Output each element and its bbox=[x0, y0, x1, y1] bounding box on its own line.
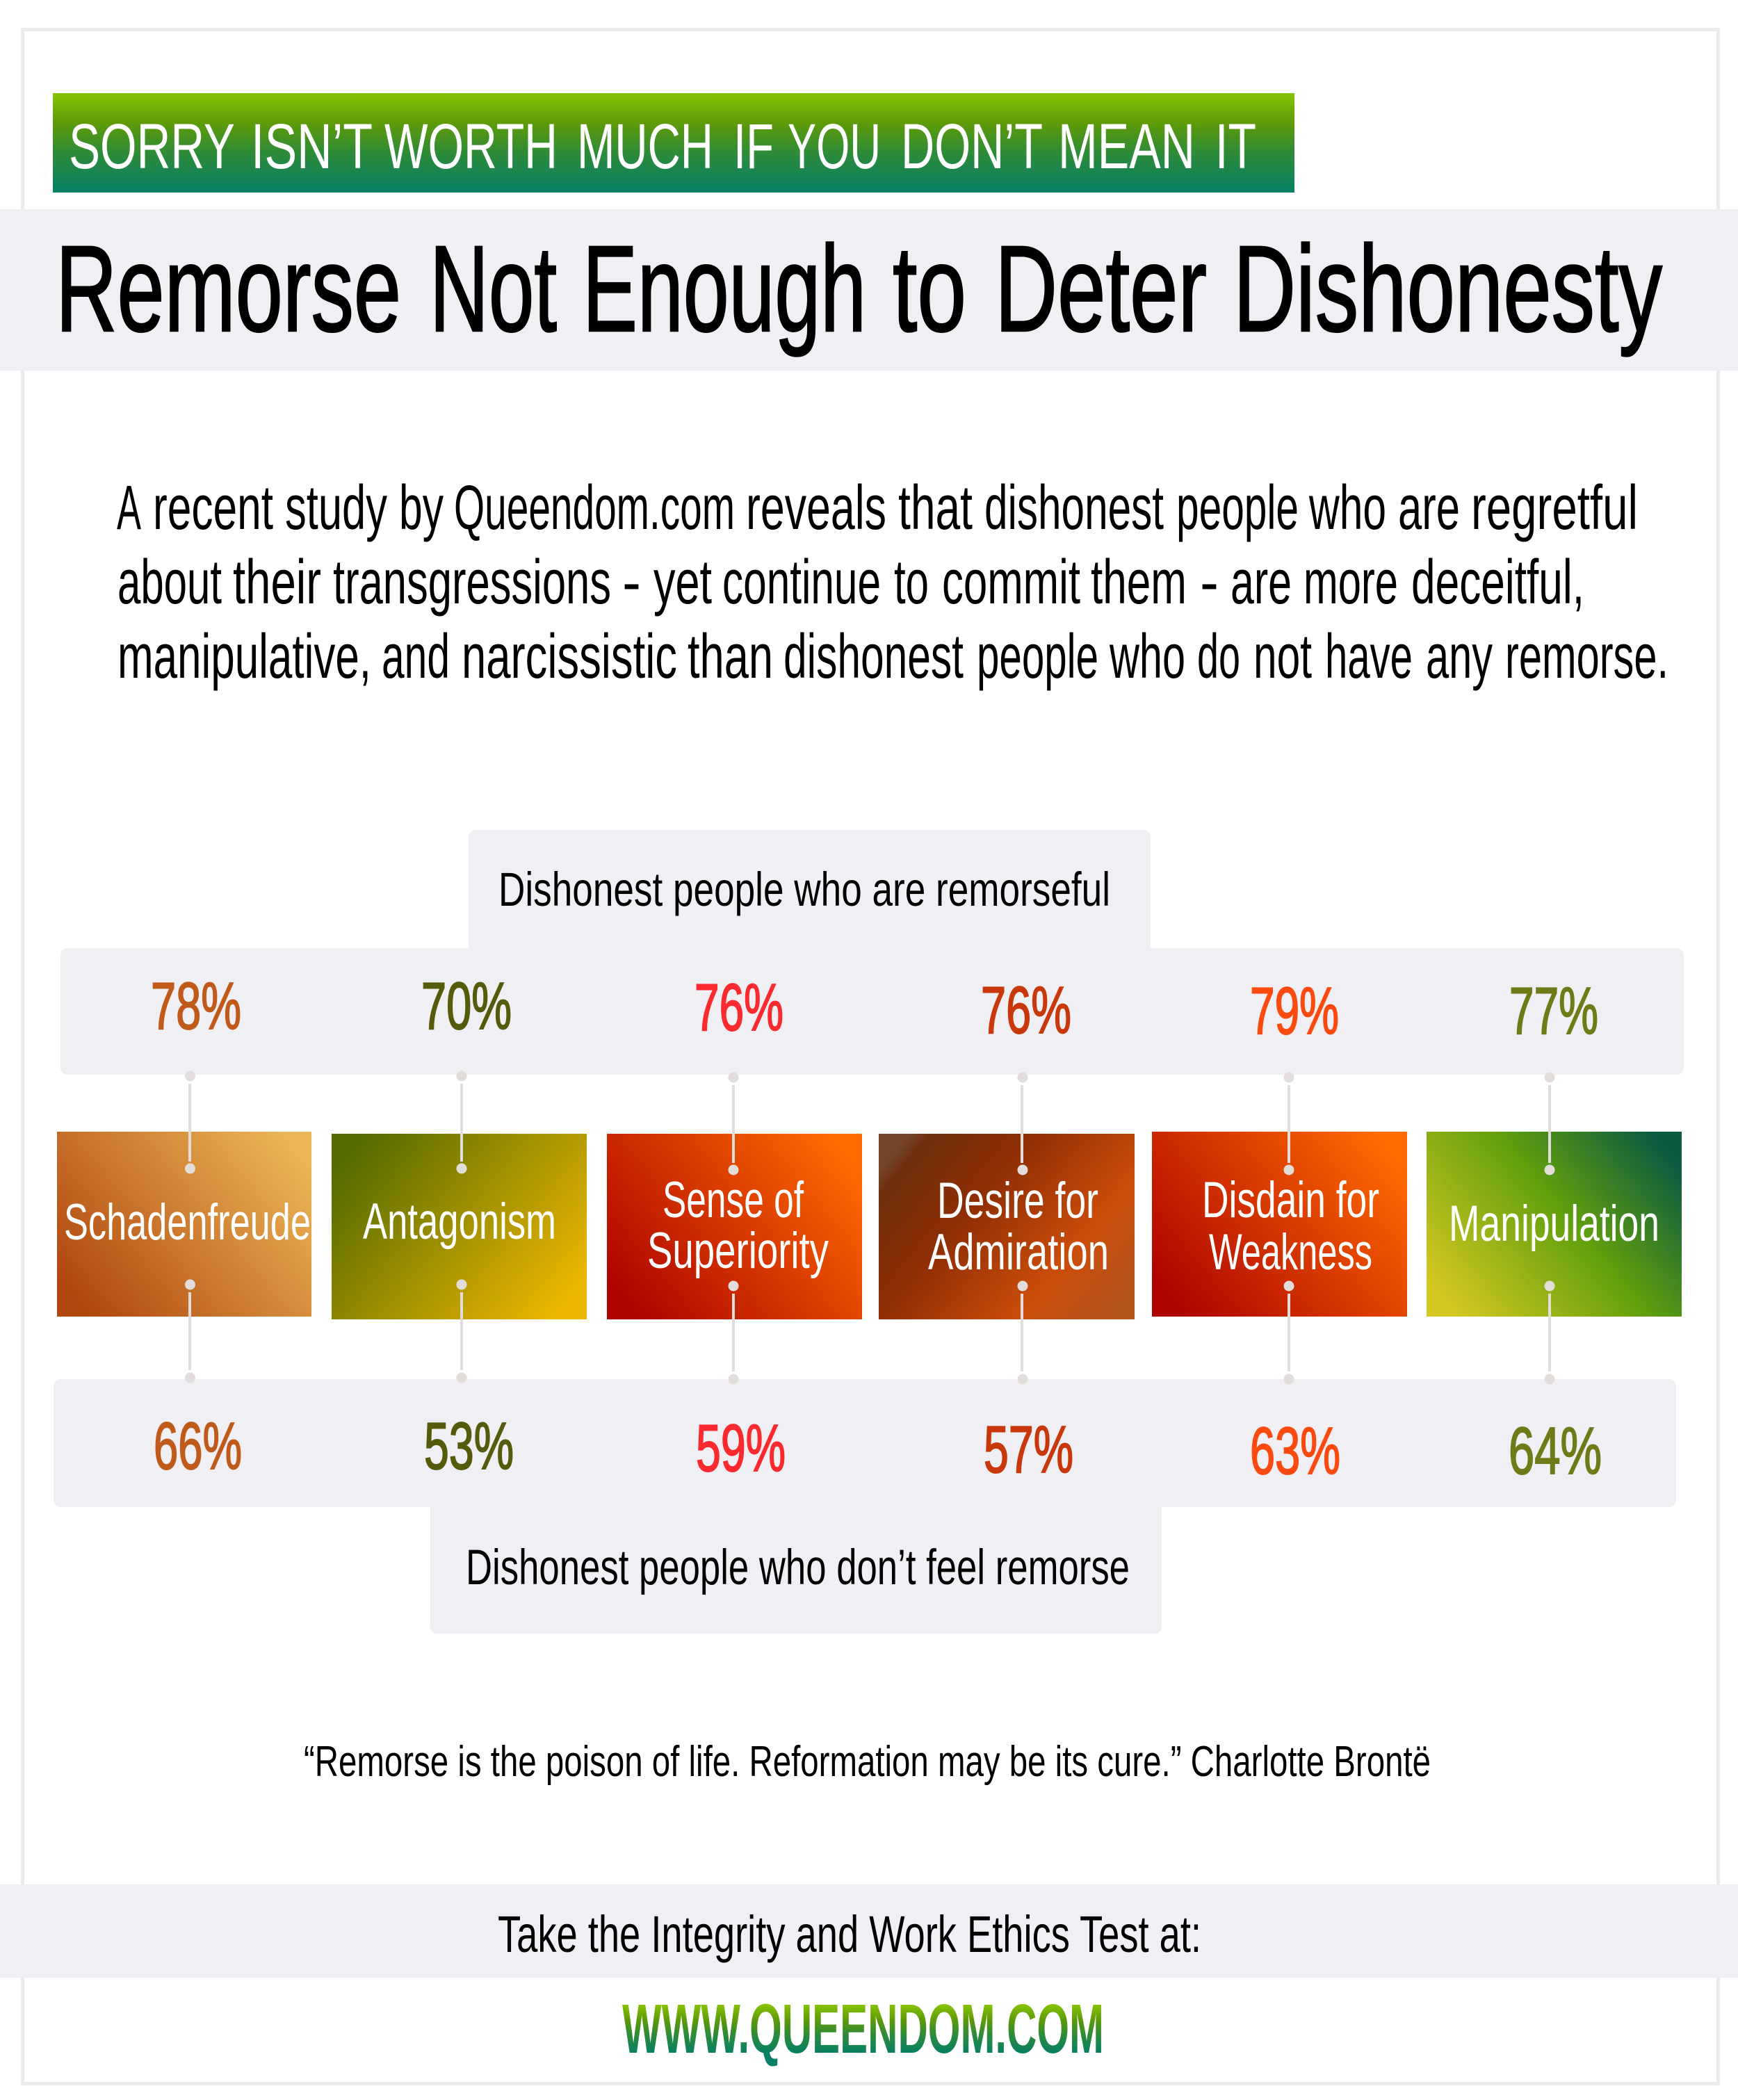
intro paragraph: that bbox=[898, 473, 973, 543]
trait: Manipulation bbox=[1427, 1132, 1682, 1317]
intro paragraph: - bbox=[1200, 548, 1219, 617]
title: Enough bbox=[583, 221, 866, 357]
intro paragraph: reveals bbox=[746, 473, 886, 543]
intro paragraph: them bbox=[1091, 548, 1187, 617]
remorseful percentages: 77% bbox=[1509, 974, 1598, 1048]
intro paragraph: who bbox=[1308, 473, 1386, 543]
intro paragraph: have bbox=[1325, 622, 1413, 692]
intro paragraph: deceitful, bbox=[1411, 548, 1584, 617]
intro paragraph: regretful bbox=[1471, 473, 1638, 543]
kicker text: MEAN bbox=[1058, 111, 1195, 182]
trait: Disdain for Weakness bbox=[1152, 1132, 1407, 1317]
intro paragraph: dishonest bbox=[783, 622, 964, 692]
trait: Disdain for Weakness: Weakness bbox=[1209, 1224, 1372, 1280]
title band bbox=[0, 209, 1738, 371]
label: no remorse: Dishonest people who don’t feel remorse bbox=[466, 1540, 1130, 1595]
no-remorse percentages: 64% bbox=[1509, 1414, 1602, 1488]
intro paragraph: are bbox=[1398, 473, 1460, 543]
intro paragraph: narcissistic bbox=[462, 622, 677, 692]
no-remorse percentages: 53% bbox=[424, 1409, 514, 1483]
remorseful percentages: 76% bbox=[981, 973, 1071, 1048]
intro paragraph: people bbox=[977, 622, 1098, 692]
kicker text: WORTH bbox=[384, 111, 558, 182]
intro paragraph: transgressions bbox=[333, 548, 611, 617]
no-remorse percentages: 66% bbox=[154, 1409, 242, 1483]
trait: Antagonism: Antagonism bbox=[363, 1194, 556, 1250]
kicker text: SORRY bbox=[69, 111, 235, 182]
trait: Desire for Admiration: Desire for bbox=[937, 1173, 1098, 1229]
title: Remorse bbox=[56, 221, 401, 357]
no-remorse percentages: 63% bbox=[1250, 1414, 1340, 1488]
footer band bbox=[0, 1885, 1738, 1978]
intro paragraph: yet bbox=[653, 548, 712, 617]
trait: Disdain for Weakness: Disdain for bbox=[1202, 1172, 1379, 1228]
kicker text: IT bbox=[1215, 111, 1256, 182]
intro paragraph: to bbox=[894, 548, 929, 617]
trait: Desire for Admiration bbox=[879, 1134, 1135, 1319]
intro paragraph: any bbox=[1426, 622, 1493, 692]
kicker text: ISN’T bbox=[251, 111, 373, 182]
kicker text: YOU bbox=[788, 111, 881, 182]
intro paragraph: people bbox=[1176, 473, 1299, 543]
website: WWW.QUEENDOM.COM bbox=[622, 1990, 1104, 2068]
trait: Schadenfreude bbox=[57, 1132, 311, 1317]
intro paragraph: do bbox=[1197, 622, 1240, 692]
no-remorse percentages: 57% bbox=[984, 1413, 1073, 1487]
connectors bbox=[185, 1071, 1554, 1385]
intro paragraph bbox=[117, 473, 1668, 692]
no-remorse percentages bbox=[154, 1409, 1602, 1488]
intro paragraph: who bbox=[1109, 622, 1185, 692]
title: to bbox=[893, 221, 966, 357]
kicker text bbox=[69, 111, 1256, 182]
intro paragraph: are bbox=[1231, 548, 1292, 617]
intro paragraph: A bbox=[117, 473, 141, 543]
intro paragraph: - bbox=[622, 548, 641, 617]
intro paragraph: by bbox=[399, 473, 444, 543]
remorseful percentages: 76% bbox=[695, 970, 783, 1045]
trait: Sense of Superiority: Sense of bbox=[663, 1172, 804, 1228]
intro paragraph: recent bbox=[153, 473, 273, 543]
trait: Manipulation: Manipulation bbox=[1449, 1196, 1659, 1252]
intro paragraph: about bbox=[117, 548, 222, 617]
kicker text: DON’T bbox=[901, 111, 1043, 182]
no-remorse percentages: 59% bbox=[696, 1411, 786, 1486]
intro paragraph: their bbox=[233, 548, 321, 617]
intro paragraph: study bbox=[285, 473, 387, 543]
intro paragraph: manipulative, bbox=[117, 622, 371, 692]
remorseful percentages bbox=[151, 969, 1598, 1048]
quote: “Remorse is the poison of life. Reformation may be its cure.” Charlotte Brontë bbox=[304, 1738, 1431, 1786]
kicker banner bbox=[53, 93, 1294, 193]
panel: no-remorse group bbox=[54, 1379, 1676, 1634]
trait: Sense of Superiority bbox=[607, 1134, 862, 1319]
intro paragraph: commit bbox=[942, 548, 1080, 617]
kicker text: MUCH bbox=[577, 111, 713, 182]
remorseful percentages: 78% bbox=[151, 969, 241, 1043]
title: Not bbox=[430, 221, 557, 357]
trait: Schadenfreude: Schadenfreude bbox=[64, 1194, 311, 1251]
intro paragraph: continue bbox=[722, 548, 881, 617]
title: Deter bbox=[995, 221, 1207, 357]
trait: Antagonism bbox=[332, 1134, 587, 1319]
intro paragraph: and bbox=[382, 622, 450, 692]
trait: Desire for Admiration: Admiration bbox=[928, 1224, 1109, 1280]
remorseful percentages: 70% bbox=[421, 969, 512, 1043]
remorseful percentages: 79% bbox=[1250, 974, 1339, 1048]
label: remorseful: Dishonest people who are remorseful bbox=[498, 863, 1110, 916]
call to action: Take the Integrity and Work Ethics Test at: bbox=[498, 1905, 1201, 1963]
intro paragraph: more bbox=[1304, 548, 1398, 617]
intro paragraph: dishonest bbox=[984, 473, 1164, 543]
panel: remorseful group bbox=[60, 830, 1684, 1075]
trait: Sense of Superiority: Superiority bbox=[647, 1223, 829, 1279]
kicker text: IF bbox=[733, 111, 774, 182]
title bbox=[56, 221, 1662, 357]
intro paragraph: not bbox=[1253, 622, 1312, 692]
intro paragraph: Queendom.com bbox=[454, 473, 735, 543]
intro paragraph: than bbox=[688, 622, 773, 692]
